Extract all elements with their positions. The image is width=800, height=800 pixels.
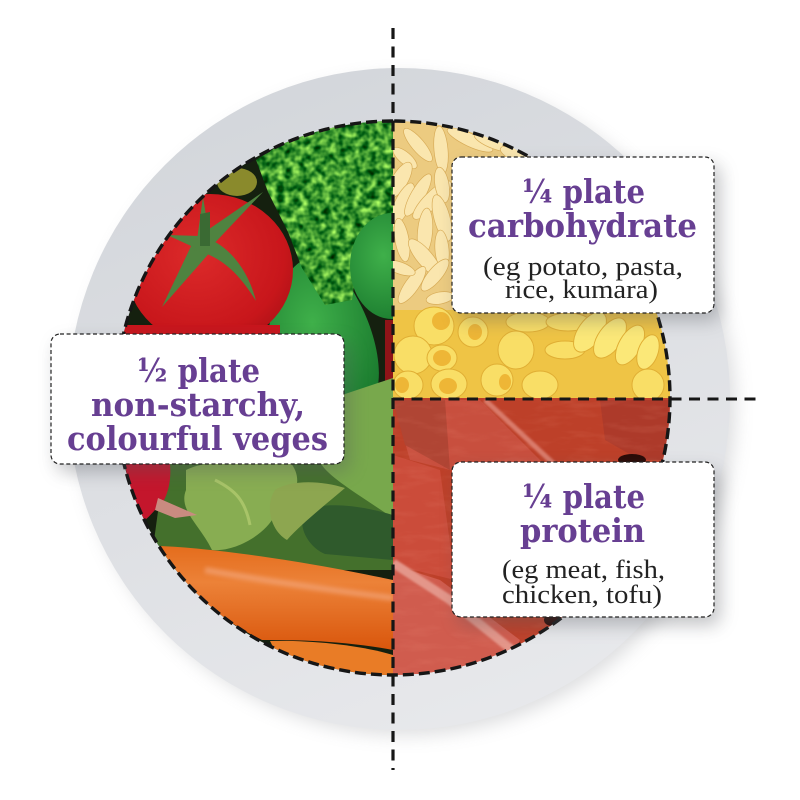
- dark gap: [618, 454, 646, 462]
- radish: [125, 464, 170, 524]
- callout: carbohydrate: [452, 157, 720, 321]
- horizontal dashed divider: [393, 398, 757, 400]
- lettuce: [150, 378, 393, 570]
- callout: carbohydrate: carbohydrate: [468, 206, 697, 245]
- green pepper right: [350, 213, 393, 319]
- tube holes: [395, 312, 511, 394]
- heading: carbohydrate: ¼ plate: [522, 172, 645, 211]
- inner circle dashed outline: [116, 121, 670, 675]
- vertical dashed divider: [391, 28, 395, 770]
- callout: vegetables: non-starchy,: [91, 385, 305, 424]
- panel: protein quarter: [390, 395, 675, 680]
- panel: carbohydrate quarter: [383, 115, 675, 405]
- plate: [68, 68, 735, 735]
- orzo pasta: [393, 126, 528, 305]
- callout: vegetables: colourful veges: [67, 419, 328, 458]
- tomato calyx: [162, 192, 263, 307]
- callout: protein: [452, 462, 720, 625]
- callout: carbohydrate: rice, kumara): [505, 275, 658, 304]
- callout: protein: protein: [520, 511, 645, 550]
- callout: protein: chicken, tofu): [502, 580, 662, 609]
- dark red vegetable: [385, 320, 393, 381]
- icon: yellow herb clump: [217, 168, 257, 196]
- icon: tomato: [120, 192, 293, 346]
- examples: protein: (eg meat, fish,: [502, 555, 665, 584]
- parsley: [256, 118, 393, 305]
- meat marbling: [393, 402, 668, 556]
- heading: vegetables: ½ plate: [137, 351, 260, 390]
- green pepper lower: [269, 262, 379, 394]
- carrot: [160, 546, 393, 650]
- examples: carbohydrate: (eg potato, pasta,: [483, 252, 683, 281]
- callout: vegetables: [51, 334, 350, 472]
- rotini pasta: [573, 313, 660, 370]
- second carrot: [270, 640, 393, 675]
- heading: protein: ¼ plate: [522, 477, 645, 516]
- meat slices: [406, 400, 541, 470]
- panel: vegetables half plate: [124, 121, 393, 675]
- tube pasta: [393, 310, 673, 400]
